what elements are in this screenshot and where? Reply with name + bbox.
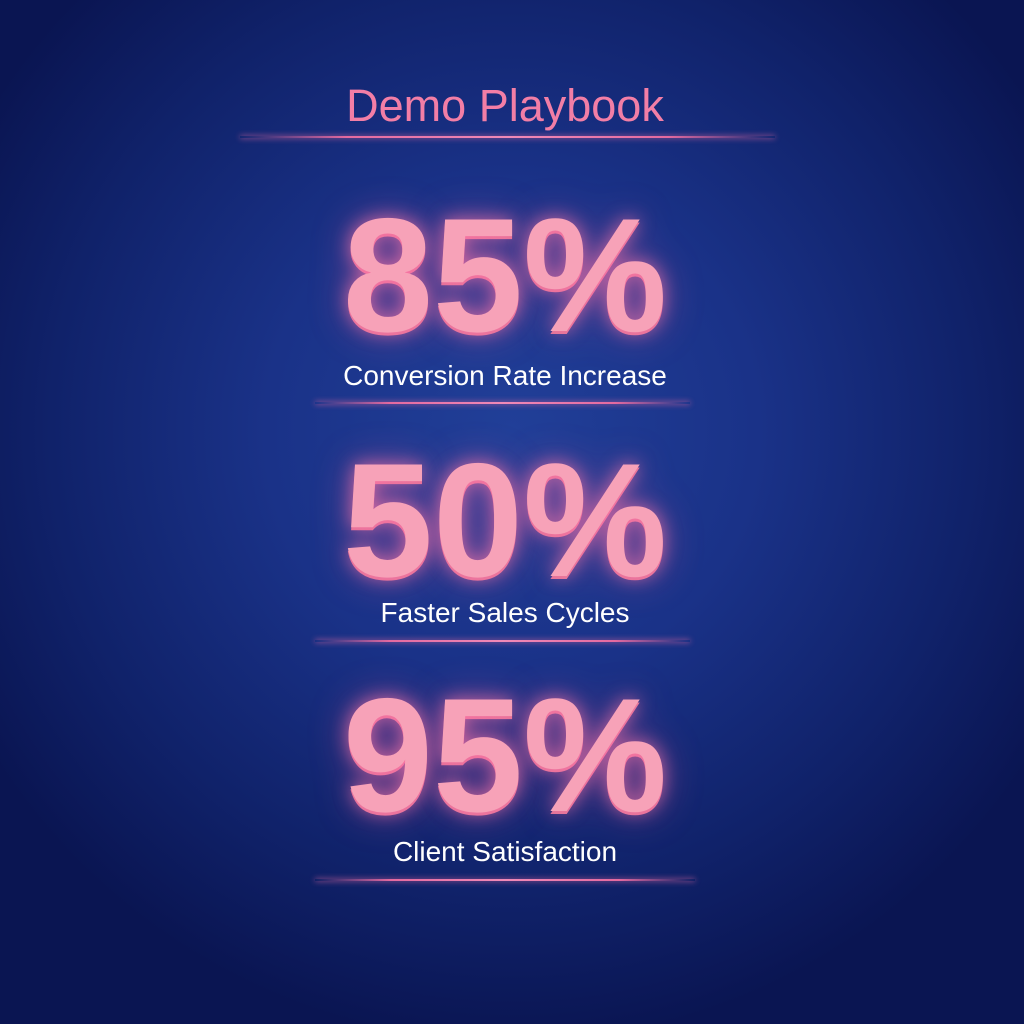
stat: 85%: 85% bbox=[343, 185, 667, 366]
label: sales cycles: Faster Sales Cycles bbox=[381, 597, 629, 628]
label: conversion: Conversion Rate Increase bbox=[343, 360, 667, 391]
stat: 95%: 95% bbox=[343, 665, 667, 846]
title: Demo Playbook bbox=[346, 80, 664, 131]
label: satisfaction: Client Satisfaction bbox=[393, 836, 617, 867]
stat: 50%: 50% bbox=[343, 430, 667, 611]
